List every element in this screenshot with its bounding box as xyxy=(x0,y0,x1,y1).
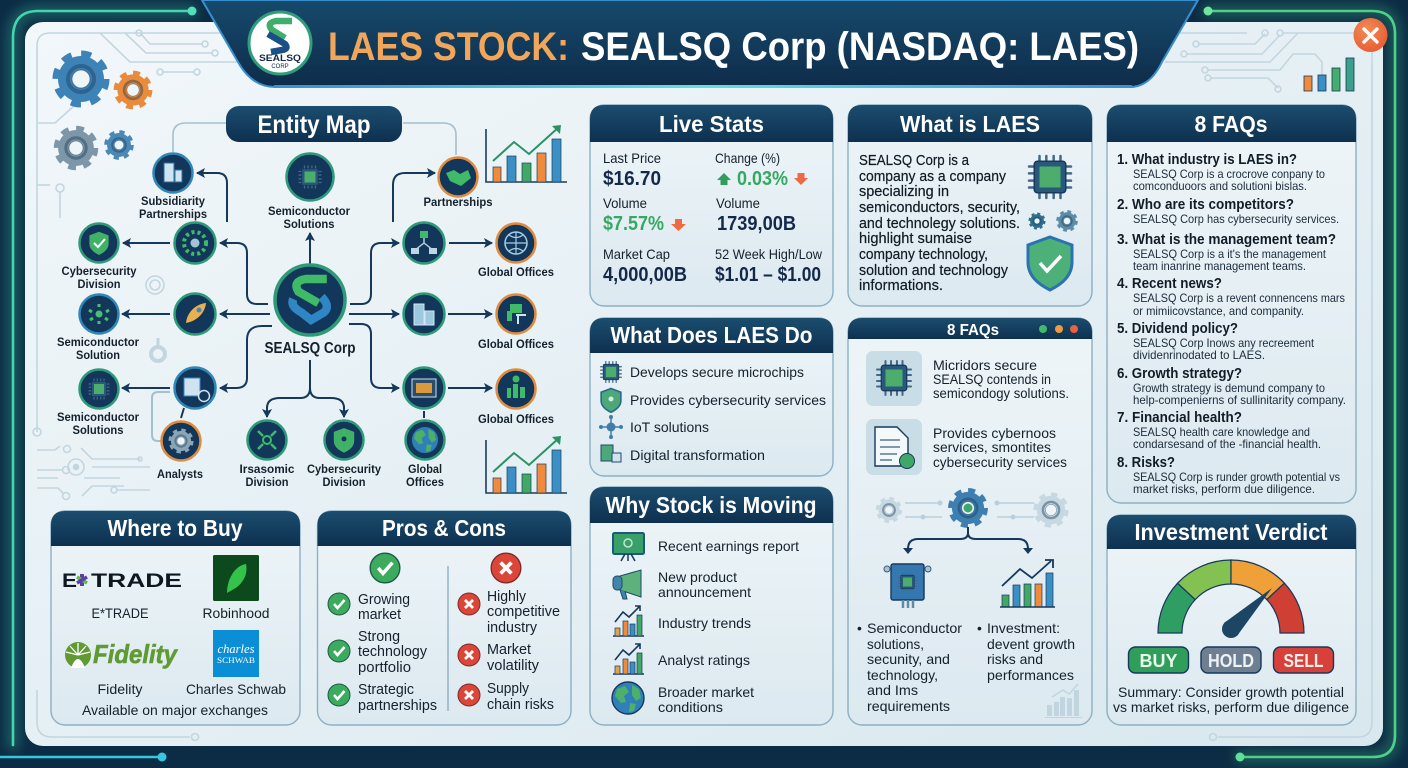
node: Global Offices 3 xyxy=(478,370,554,426)
label: Charles Schwab: Charles Schwab xyxy=(186,681,286,697)
faq 5: 5. Dividend policy? xyxy=(1117,321,1238,337)
text: left bullets: solutions, xyxy=(867,636,924,652)
node: Semiconductor Solutions top: Solutions xyxy=(284,217,335,231)
stat: market cap xyxy=(603,246,687,286)
faq 4: 4. Recent news? xyxy=(1117,276,1222,292)
window dots xyxy=(1039,325,1078,333)
node: gear hub xyxy=(174,222,216,264)
faq 1: SEALSQ Corp is a crocrove conpany to xyxy=(1133,167,1325,181)
faq 8: SEALSQ Corp is runder growth potential vs xyxy=(1133,470,1340,484)
panel: 8 FAQs right: 8 FAQs xyxy=(1194,111,1268,137)
node: Subsidiarity Partnerships: Partnerships xyxy=(139,207,207,221)
logo: CORP xyxy=(271,64,289,70)
node: Semiconductor Solutions top: Semiconductor xyxy=(268,204,350,218)
node: Irsasomic Division: Irsasomic xyxy=(240,462,295,476)
node: Cybersecurity Division lower: Cybersecurity xyxy=(307,462,381,476)
node: Semiconductor Solutions left: Semiconductor xyxy=(57,410,139,424)
faq 4: SEALSQ Corp is a revent connencens mars xyxy=(1133,291,1345,305)
node: Analysts xyxy=(157,422,203,481)
icon: large blue gear xyxy=(56,54,106,104)
button: SELL xyxy=(1274,647,1334,673)
label: Robinhood: Robinhood xyxy=(202,605,270,621)
text: description: highlight sumaise xyxy=(859,231,972,247)
stat: market cap: 4,000,00B xyxy=(603,264,687,286)
item: earnings xyxy=(613,533,799,561)
logo: Charles Schwab: charles xyxy=(218,641,254,656)
tile: chip xyxy=(866,351,922,406)
item: product: announcement xyxy=(658,584,751,600)
text: chip tile: semicondogy solutions. xyxy=(933,386,1069,401)
chart: lower growth xyxy=(486,436,567,493)
button: HOLD xyxy=(1201,647,1261,673)
text: summary: vs market risks, perform due diligence xyxy=(1113,699,1349,715)
pro: growing market: Growing xyxy=(358,591,410,608)
con: supply chain risks xyxy=(458,680,554,713)
stat: 52 week: 52 Week High/Low xyxy=(715,246,823,262)
text: right bullets: devent growth xyxy=(987,636,1075,652)
faq 7: 7. Financial health? xyxy=(1117,410,1242,426)
button: BUY: BUY xyxy=(1139,651,1178,671)
faq 1 xyxy=(1117,152,1325,193)
faq 1: comconduoors and solutioni bislas. xyxy=(1133,179,1307,193)
faq 7 xyxy=(1117,410,1321,451)
connector lines xyxy=(173,123,456,155)
faq 7: condarsesand of the -financial health. xyxy=(1133,437,1321,451)
text: document tile: services, smontites xyxy=(933,440,1051,455)
node: Cybersecurity Division: Cybersecurity xyxy=(62,264,137,278)
node: Subsidiarity Partnerships xyxy=(139,154,207,221)
item: product: New product xyxy=(658,569,737,585)
node: Cybersecurity Division lower: Division xyxy=(322,475,366,489)
con: highly competitive industry: industry xyxy=(487,619,537,636)
node: Global Offices 2 xyxy=(478,294,554,351)
node: Global Offices 3: Global Offices xyxy=(478,412,554,426)
text: description: company technology, xyxy=(859,247,988,263)
panel: 8 FAQs right xyxy=(1107,105,1356,503)
title: SEALSQ Corp (NASDAQ: LAES) xyxy=(581,25,1139,69)
text: chip tile: Micridors secure xyxy=(933,358,1037,373)
pro: strategic partnerships: partnerships xyxy=(358,697,437,714)
item: market xyxy=(612,682,754,715)
logo: E*TRADE: TRADE xyxy=(91,571,182,592)
panel: entity map xyxy=(57,106,567,493)
stat: change: 0.03% xyxy=(737,168,788,190)
panel: 8 FAQs middle: 8 FAQs xyxy=(947,322,999,339)
panel: what is LAES xyxy=(848,105,1092,306)
node: Global Offices lower xyxy=(406,420,444,489)
text: document tile: cybersecurity services xyxy=(933,455,1067,470)
logo: Robinhood xyxy=(213,555,259,601)
icon: module chip xyxy=(884,564,931,608)
text: left bullets: • xyxy=(857,620,862,636)
process gears xyxy=(878,490,1066,526)
faq 8: 8. Risks? xyxy=(1117,455,1175,471)
panel: 8 FAQs middle xyxy=(848,318,1092,725)
panel: live stats: Live Stats xyxy=(659,111,764,137)
con: highly competitive industry: Highly xyxy=(487,588,526,605)
text: right bullets: • xyxy=(977,620,982,636)
chart: upper growth xyxy=(486,125,567,182)
faq 6 xyxy=(1117,366,1346,407)
arrows: hub connections xyxy=(122,173,492,441)
faq 5 xyxy=(1117,321,1315,362)
icon: grey gear xyxy=(56,128,96,168)
item: trends: Industry trends xyxy=(658,615,751,631)
panel: pros and cons xyxy=(318,511,571,725)
faq 4 xyxy=(1117,276,1345,318)
node: Irsasomic Division xyxy=(240,420,295,489)
button: BUY xyxy=(1128,647,1188,673)
heading: Entity Map xyxy=(226,106,402,142)
text: description: semiconductors, security, xyxy=(859,200,1020,216)
pro: strong technology portfolio: technology xyxy=(358,643,427,660)
pro: strong technology portfolio: portfolio xyxy=(358,659,411,676)
icon: shield xyxy=(1028,237,1072,290)
node: rocket xyxy=(174,294,216,334)
node: Semiconductor Solutions left: Solutions xyxy=(72,423,124,437)
logo: SEALSQ xyxy=(259,53,302,64)
icon: faded chart xyxy=(1045,684,1082,718)
pro: growing market: market xyxy=(358,606,402,623)
pro: growing market xyxy=(328,591,410,623)
node: Partnerships xyxy=(424,158,493,209)
con: market volatility xyxy=(458,641,539,674)
logo: Fidelity: Fidelity xyxy=(93,639,178,669)
node: report xyxy=(174,368,216,408)
icon: growth chart xyxy=(1000,560,1055,607)
node: Cybersecurity Division lower xyxy=(307,420,381,489)
faq 7: SEALSQ health care knowledge and xyxy=(1133,425,1310,439)
text: right bullets: risks and xyxy=(987,651,1043,667)
decorative gears xyxy=(56,54,150,168)
text: document tile: Provides cybernoos xyxy=(933,426,1056,441)
stat: last price xyxy=(603,150,661,190)
panel: investment verdict: Investment Verdict xyxy=(1134,519,1328,545)
faq 3: team inanrine management teams. xyxy=(1133,259,1306,273)
panel: why stock is moving: Why Stock is Moving xyxy=(606,492,816,518)
node: Subsidiarity Partnerships: Subsidiarity xyxy=(141,194,205,208)
icon: top-right mini bars xyxy=(1304,58,1354,91)
faq 5: dividenrinodated to LAES. xyxy=(1133,348,1265,362)
stat: volume: Volume xyxy=(716,195,760,211)
text: left bullets: technology, xyxy=(867,667,938,683)
stat: change: Change (%) xyxy=(715,150,780,166)
heading: Entity Map: Entity Map xyxy=(258,111,370,139)
item: digital: Digital transformation xyxy=(630,447,765,463)
text: chip tile: SEALSQ contends in xyxy=(933,372,1051,387)
text: left bullets: secunity, and xyxy=(867,651,950,667)
node: Semiconductor Solutions left xyxy=(57,370,139,437)
node: SEALSQ Corp hub: SEALSQ Corp xyxy=(264,340,356,357)
tile: document xyxy=(866,419,922,475)
con: highly competitive industry xyxy=(458,588,560,636)
text: right bullets: Investment: xyxy=(987,620,1060,636)
panel: investment verdict xyxy=(1107,515,1356,725)
icon: big check xyxy=(370,553,400,583)
text: description: and technolegy solutions. xyxy=(859,216,1020,232)
stat: last price: Last Price xyxy=(603,150,661,166)
logo xyxy=(249,12,311,74)
button: SELL: SELL xyxy=(1284,651,1324,671)
stat: volume percent: Volume xyxy=(603,195,647,211)
con: market volatility: Market xyxy=(487,641,532,658)
node: Cybersecurity Division: Division xyxy=(78,277,120,291)
stat: volume percent xyxy=(603,195,686,235)
panel: what is LAES: What is LAES xyxy=(900,111,1040,137)
faq 6: 6. Growth strategy? xyxy=(1117,366,1242,382)
faq 3: 3. What is the management team? xyxy=(1117,232,1336,248)
label: E*TRADE: E*TRADE xyxy=(92,605,148,621)
panel: live stats xyxy=(590,105,833,306)
faq 6: Growth strategy is demund company to xyxy=(1133,381,1325,395)
node: building xyxy=(404,294,444,334)
pro: strategic partnerships xyxy=(328,681,437,714)
icon: small gears xyxy=(1030,212,1076,230)
item: trends xyxy=(613,606,751,636)
logo: E*TRADE: E xyxy=(62,571,77,592)
close button xyxy=(1354,18,1388,52)
faq 3 xyxy=(1117,232,1336,273)
item: microchips: Develops secure microchips xyxy=(630,364,804,380)
node: Semiconductor Solution xyxy=(57,294,139,362)
stat: market cap: Market Cap xyxy=(603,246,670,262)
panel: pros and cons: Pros & Cons xyxy=(382,515,506,541)
stat: volume percent: $7.57% xyxy=(603,213,664,235)
arrows: branch xyxy=(903,527,1033,554)
stat: last price: $16.70 xyxy=(603,168,661,190)
panel: where to buy: Where to Buy xyxy=(108,515,243,541)
con: supply chain risks: chain risks xyxy=(487,696,554,713)
pro: strategic partnerships: Strategic xyxy=(358,681,414,698)
text: left bullets: requirements xyxy=(867,698,950,714)
panel: what does LAES do xyxy=(590,318,833,476)
caption: Available on major exchanges xyxy=(82,702,268,718)
title: LAES STOCK: xyxy=(328,25,569,69)
logo: E*TRADE xyxy=(62,571,182,592)
text: left bullets: and Ims xyxy=(867,682,918,698)
logo: Charles Schwab xyxy=(213,630,259,677)
con: highly competitive industry: competitive xyxy=(487,603,560,620)
item: IoT xyxy=(599,415,709,439)
icon: big cross xyxy=(491,553,521,583)
panel: what does LAES do: What Does LAES Do xyxy=(610,322,812,348)
gauge xyxy=(1158,560,1304,638)
text: description: specializing in xyxy=(859,184,949,200)
text: summary: Summary: Consider growth potential xyxy=(1118,684,1344,700)
text: left bullets: Semiconductor xyxy=(867,620,962,636)
node: Irsasomic Division: Division xyxy=(246,475,288,489)
item: analysts: Analyst ratings xyxy=(658,652,750,668)
node: locks network xyxy=(404,222,444,264)
stat: 52 week xyxy=(715,246,823,286)
node: Global Offices lower: Global xyxy=(408,462,442,476)
item: market: conditions xyxy=(658,699,723,715)
node: Partnerships: Partnerships xyxy=(424,195,493,209)
node: Semiconductor Solutions top xyxy=(268,154,350,231)
stat: 52 week: $1.01 – $1.00 xyxy=(715,264,821,286)
node: SEALSQ Corp hub xyxy=(264,265,356,357)
node: Global Offices lower: Offices xyxy=(406,475,444,489)
text: description: solution and technology xyxy=(859,263,1009,279)
faq 2 xyxy=(1117,197,1339,226)
icon: small blue gear xyxy=(106,132,132,158)
con: supply chain risks: Supply xyxy=(487,680,529,697)
icon: orange gear xyxy=(116,73,150,107)
faq 8 xyxy=(1117,455,1340,496)
faq 4: or mimiicovstance, and companity. xyxy=(1133,304,1304,318)
panel: why stock is moving xyxy=(590,487,833,725)
node: Global Offices 1: Global Offices xyxy=(478,265,554,279)
item: earnings: Recent earnings report xyxy=(658,538,799,554)
faq 2: 2. Who are its competitors? xyxy=(1117,197,1294,213)
gauge needle xyxy=(1222,588,1272,638)
pro: strong technology portfolio xyxy=(328,628,427,676)
node: Analysts: Analysts xyxy=(157,467,203,481)
stat: change xyxy=(715,150,808,190)
pro: strong technology portfolio: Strong xyxy=(358,628,400,645)
panel: where to buy xyxy=(51,511,300,725)
item: analysts xyxy=(613,644,750,674)
logo: Charles Schwab: SCHWAB xyxy=(217,655,255,665)
faq 5: SEALSQ Corp Inows any recreement xyxy=(1133,336,1315,350)
faq 3: SEALSQ Corp is a it's the management xyxy=(1133,247,1327,261)
item: product xyxy=(613,569,751,600)
icon: chip xyxy=(1029,156,1071,198)
item: cybersecurity xyxy=(601,389,826,412)
node: display xyxy=(404,368,444,408)
text: description: informations. xyxy=(859,278,943,294)
faq 2: SEALSQ Corp has cybersecurity services. xyxy=(1133,212,1339,226)
item: market: Broader market xyxy=(658,684,754,700)
button: HOLD: HOLD xyxy=(1208,651,1254,671)
item: microchips xyxy=(601,362,804,382)
faq 6: help-compenierns of sullinitarity company. xyxy=(1133,393,1346,407)
item: IoT: IoT solutions xyxy=(630,419,709,435)
text: right bullets: performances xyxy=(987,667,1074,683)
stat: volume: 1739,00B xyxy=(717,213,796,235)
item: cybersecurity: Provides cybersecurity services xyxy=(630,392,826,408)
faq 1: 1. What industry is LAES in? xyxy=(1117,152,1297,168)
text: description: SEALSQ Corp is a xyxy=(859,153,970,169)
node: Semiconductor Solution: Semiconductor xyxy=(57,335,139,349)
node: Global Offices 1 xyxy=(478,224,554,279)
faq 8: market risks, perform due diligence. xyxy=(1133,482,1315,496)
header banner xyxy=(202,0,1198,88)
node: Cybersecurity Division xyxy=(62,224,137,291)
con: market volatility: volatility xyxy=(487,657,539,674)
node: Global Offices 2: Global Offices xyxy=(478,337,554,351)
text: description: company as a company xyxy=(859,169,1007,185)
node: Semiconductor Solution: Solution xyxy=(76,348,120,362)
stat: volume xyxy=(716,195,796,235)
label: Fidelity: Fidelity xyxy=(98,681,142,697)
